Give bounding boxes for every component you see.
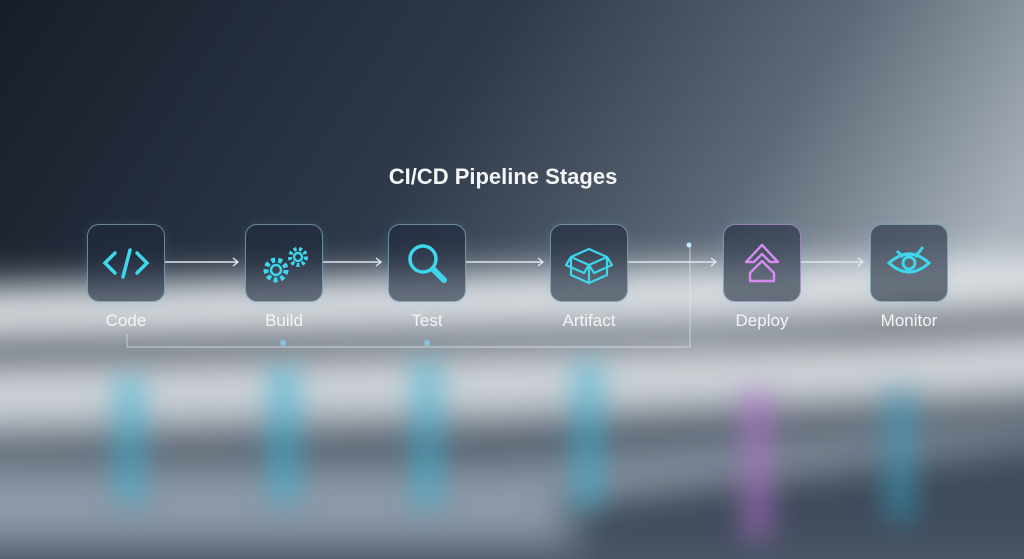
title: CI/CD Pipeline Stages — [389, 164, 617, 189]
stage: Artifact — [550, 224, 628, 302]
stage: Code — [87, 224, 165, 302]
stage: Test — [388, 224, 466, 302]
stage: Monitor — [870, 224, 948, 302]
stage: Build — [245, 224, 323, 302]
text: Code — [106, 311, 146, 330]
text: Test — [411, 311, 443, 330]
text: Artifact — [563, 311, 615, 330]
stage: Deploy — [723, 224, 801, 302]
text: Monitor — [881, 311, 937, 330]
text: Build — [265, 311, 303, 330]
text: Deploy — [736, 311, 788, 330]
labels — [106, 311, 937, 330]
